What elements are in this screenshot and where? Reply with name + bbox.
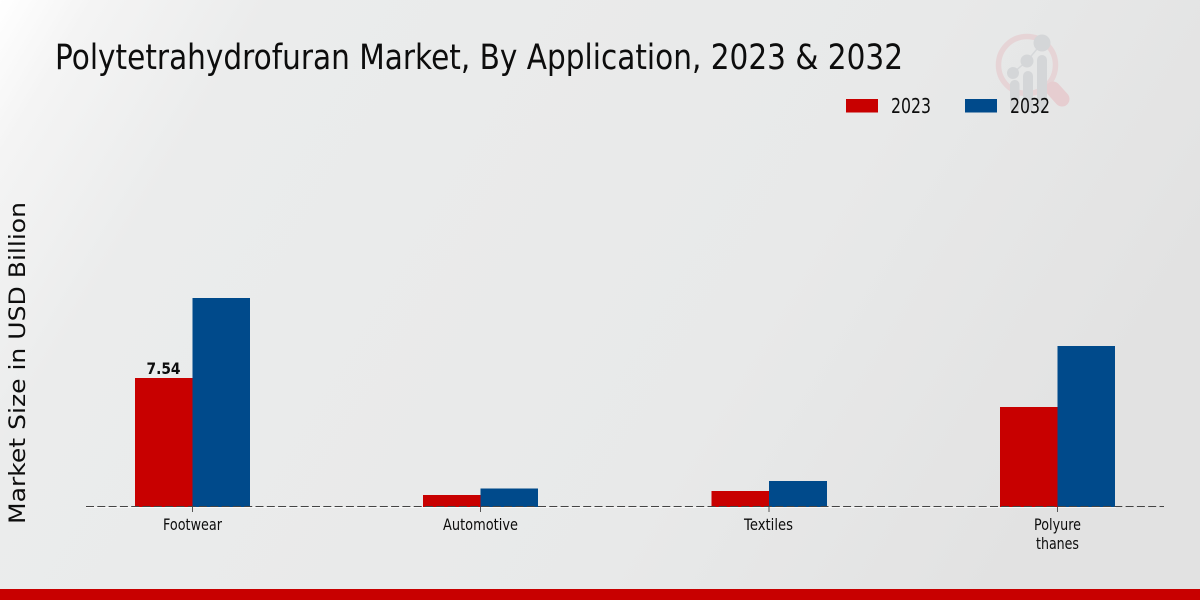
x-axis labels — [163, 515, 1081, 553]
x-axis baseline — [86, 506, 1164, 508]
x-axis labels: Footwear — [163, 515, 222, 534]
legend item: 2032: 2032 — [1010, 94, 1050, 118]
x-axis labels: Textiles — [743, 515, 793, 534]
footer bar — [0, 589, 1200, 600]
bar chart — [86, 298, 1164, 553]
group: Footwear — [135, 298, 250, 507]
group: Textiles — [712, 481, 827, 507]
x-axis labels: Polyure — [1034, 515, 1081, 534]
group: Automotive — [423, 488, 538, 507]
legend — [846, 94, 1050, 118]
y-axis label: Market Size in USD Billion — [5, 202, 31, 524]
group: Polyurethanes — [1000, 346, 1115, 507]
x-axis labels: Automotive — [443, 515, 518, 534]
legend item: 2032 — [965, 94, 1050, 118]
title: Polytetrahydrofuran Market, By Application, 2023 & 2032 — [55, 38, 903, 78]
icon: watermark logo — [998, 34, 1062, 112]
x-axis labels: thanes — [1036, 534, 1079, 553]
data label: 7.54: 7.54 — [146, 359, 180, 378]
legend item: 2023 — [846, 94, 931, 118]
legend item: 2023: 2023 — [891, 94, 931, 118]
